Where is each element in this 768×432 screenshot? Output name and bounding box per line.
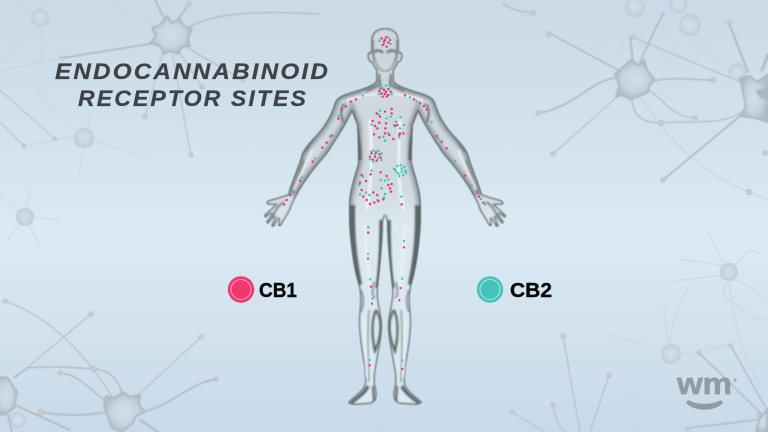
neuron: far right large: [578, 0, 768, 183]
neuron: top left faint: [0, 0, 146, 245]
neuron: bottom left pair: [0, 299, 218, 432]
neuron: bottom centre: [510, 334, 611, 432]
CB1 dots legs: [368, 233, 404, 369]
CB1 and CB2 receptor dots: upper body: [284, 37, 485, 233]
CB2 dots upper body: [292, 37, 485, 227]
CB1 and CB2 receptor dots: legs: [368, 227, 404, 369]
icon: CB1 pink circle: [228, 276, 254, 303]
neuron: top left large: [0, 0, 320, 157]
legend: CB2: [477, 276, 552, 303]
title: RECEPTOR SITES: [78, 86, 308, 111]
CB1 dots upper body: [284, 37, 483, 233]
neuron: bottom right large: [686, 344, 768, 432]
logo: wm: [676, 366, 737, 410]
neuron: bottom right faint: [608, 232, 768, 400]
legend: CB2: CB2: [510, 280, 552, 302]
icon: CB2 teal circle: [477, 276, 503, 303]
title: [55, 59, 330, 111]
title: ENDOCANNABINOID: [55, 59, 330, 84]
legend: CB1: CB1: [259, 280, 297, 302]
neuron: top right main: [503, 0, 768, 200]
logo: wm: wm: [676, 366, 732, 401]
human body figure: [264, 28, 506, 405]
legend: CB1: [228, 276, 297, 303]
CB2 dots legs: [368, 227, 404, 360]
